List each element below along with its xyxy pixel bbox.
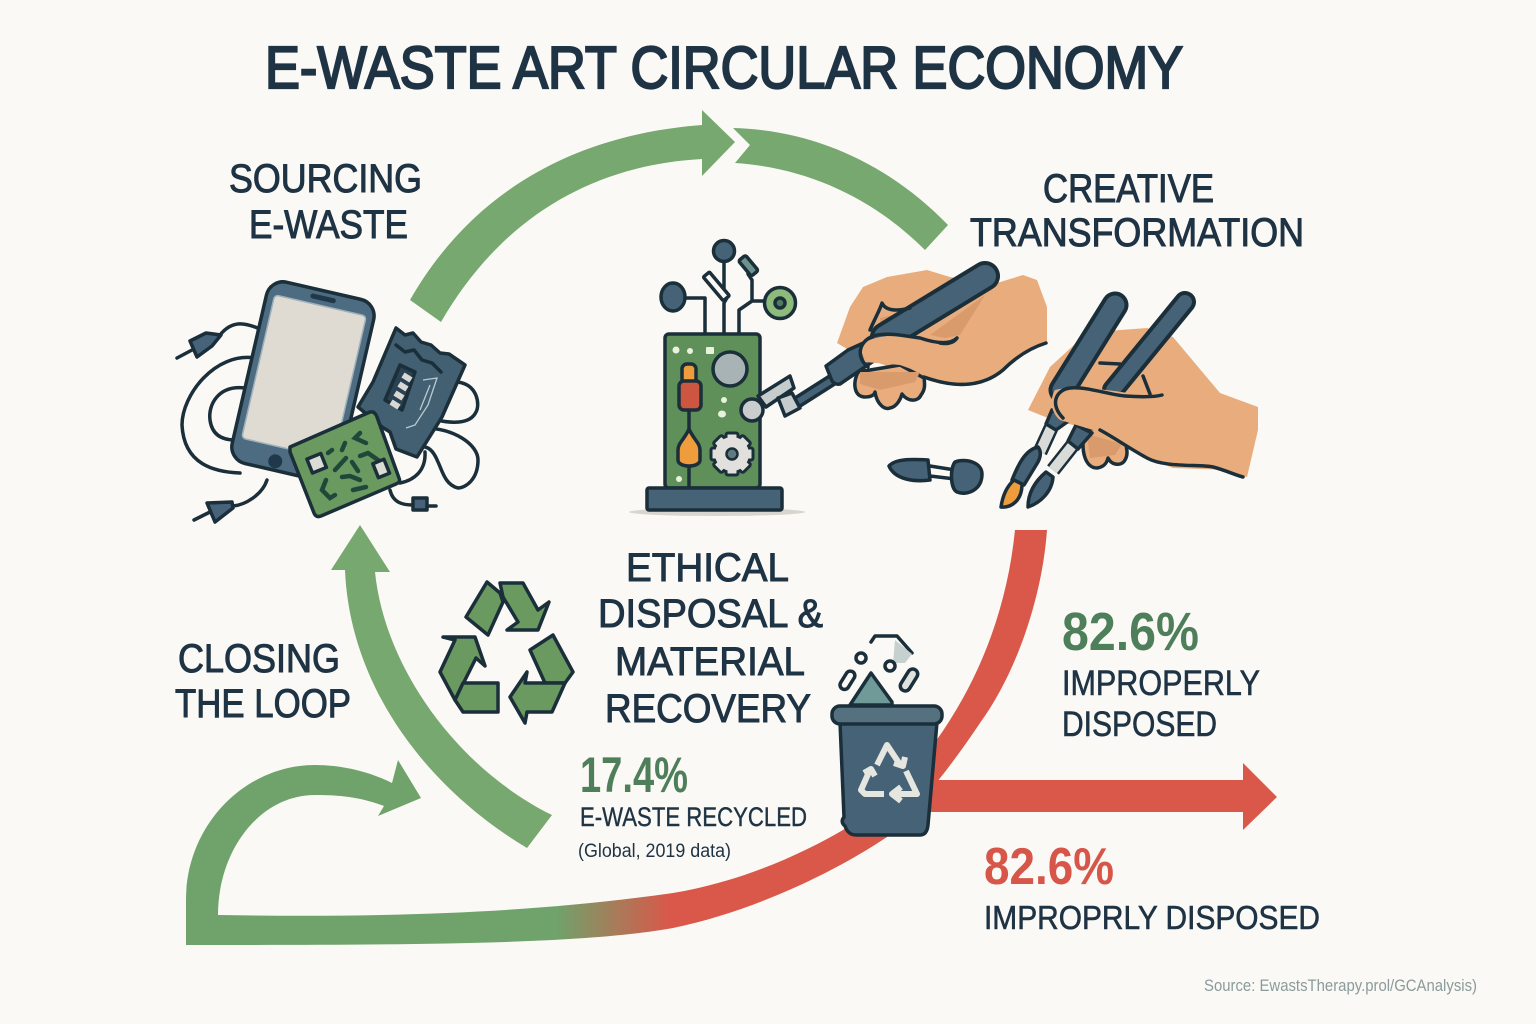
stat: 17.4% e-waste recycled: E-WASTE RECYCLED [580,802,807,832]
heading: ethical disposal and material recovery [598,546,823,731]
heading: creative transformation: CREATIVE [1043,167,1214,211]
thumb [1052,388,1240,470]
heading: closing the loop [175,637,351,726]
plug bottom left [207,502,233,522]
heading: closing the loop: THE LOOP [175,682,351,726]
bin recycling mark [861,745,917,801]
heading: creative transformation [970,167,1304,255]
dark chip [358,328,465,457]
icon: e-waste pile [177,278,478,522]
thumb [860,336,1000,383]
plug right [413,498,427,510]
arrow: closing the loop up to sourcing [331,525,552,848]
icon: loose brush tip [889,460,982,493]
stat: 17.4% e-waste recycled: 17.4% [580,747,688,803]
shadow [629,508,805,516]
base [647,488,782,510]
brush one [1001,305,1115,507]
falling debris [838,636,920,705]
hand back [1028,328,1258,477]
icon: hand with paint brushes [1001,302,1258,507]
heading: ethical disposal and material recovery: MATERIAL [615,640,805,684]
brush two [1028,302,1185,507]
heading: creative transformation: TRANSFORMATION [970,211,1304,255]
stat: 82.6% improperly disposed (red) [984,838,1320,936]
bin body [840,722,937,835]
plug top left [190,333,221,357]
stat: 82.6% improperly disposed (green): DISPOSED [1062,705,1217,744]
stat: 82.6% improperly disposed (green): IMPROPERLY [1062,664,1260,703]
tool [741,276,985,421]
arrow: waste line from creative transformation to closing loop [186,530,1047,945]
arrow: sourcing to transformation [410,110,735,322]
heading: ethical disposal and material recovery: ETHICAL [626,546,789,590]
green circuit board [290,412,400,517]
stat: 82.6% improperly disposed (green) [1062,602,1260,744]
heading: sourcing e-waste [229,157,422,247]
phone [228,278,377,484]
stat: 82.6% improperly disposed (green): 82.6% [1062,602,1199,662]
finger shadow [860,372,920,390]
icon: circuit sculpture [629,240,805,516]
heading: closing the loop: CLOSING [178,637,340,681]
arrow: improperly disposed [925,763,1277,830]
gear [711,433,753,475]
icon: recycling symbol [440,582,573,723]
circuit board body [665,334,760,488]
heading: ethical disposal and material recovery: DISPOSAL & [598,592,823,636]
board dots [672,346,727,482]
hand back [837,270,1047,385]
icon: hand with soldering tool [741,270,1047,421]
arrow: transformation segment [733,128,948,250]
icon: recycling bin with falling waste [832,636,942,835]
stat: 17.4% e-waste recycled [578,747,807,862]
stat: 82.6% improperly disposed (red): IMPROPRLY DISPOSED [984,899,1320,936]
hand shadow [880,295,985,338]
fingers [1083,425,1127,468]
source note: Source: EwastsTherapy.prol/GCAnalysis) [1204,976,1477,995]
stat: 82.6% improperly disposed (red): 82.6% [984,838,1114,896]
wire terminals [661,240,796,318]
cables behind devices [182,324,478,506]
heading: sourcing e-waste: SOURCING [229,157,422,201]
components [687,408,691,487]
gauge [713,352,747,386]
finger shadow [1087,434,1122,458]
heading: ethical disposal and material recovery: RECOVERY [605,687,811,731]
fingers [855,365,925,408]
stat: 17.4% e-waste recycled: (Global, 2019 data) [578,841,731,862]
heading: sourcing e-waste: E-WASTE [249,203,408,247]
wires [684,255,766,333]
title: E-WASTE ART CIRCULAR ECONOMY [265,35,1183,101]
bin lid [832,706,942,724]
